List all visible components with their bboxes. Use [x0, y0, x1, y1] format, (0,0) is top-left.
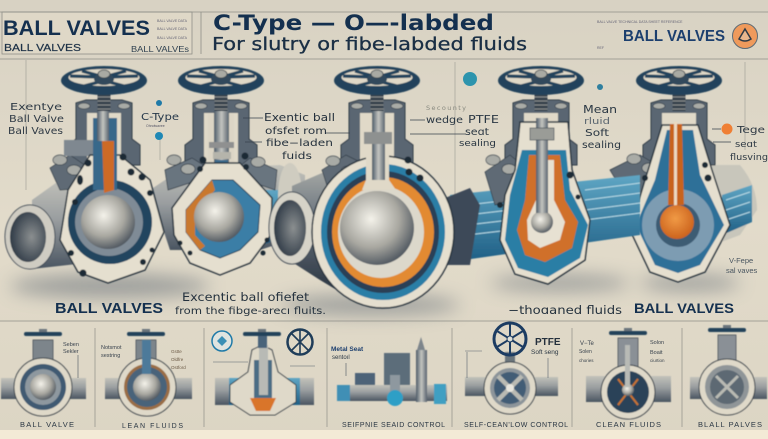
bottom panel 4: metal seat control: SEIFPNIE SEAID CONTROL	[342, 422, 445, 429]
bottom panel 5: self-clean flow control	[464, 323, 568, 429]
bottom panel 6: clean fluids: Solon	[650, 340, 664, 346]
valve 5: V-type with orange ball	[610, 66, 757, 282]
label: eccentric ball valve left	[8, 102, 64, 137]
label: soft sealing callout: rluid	[584, 117, 610, 127]
bottom panel 7: ball valves	[690, 325, 767, 429]
label: eccentric ball valve left: Ball Valve	[9, 114, 64, 125]
label: eccentric ball callout: fibe−laden	[266, 138, 333, 149]
bottom panel 6: clean fluids: ciurtion	[650, 358, 665, 363]
heading: main title: C-Type — O—-labded	[213, 11, 494, 35]
caption: eccentric ball offset: from the fibge-arecı fluits.	[175, 306, 326, 317]
label: V-type seal valves	[726, 256, 758, 275]
bottom panel 5: self-clean flow control: SELF-CEAN'LOW CONTROL	[464, 422, 568, 429]
label: PTFE wedge callout	[410, 104, 499, 149]
bottom panel 2: lean fluids	[101, 329, 192, 430]
header panel: left title box: BALL VALVES	[4, 43, 81, 54]
label: eccentric ball valve left: Exentye	[10, 102, 62, 113]
label: eccentric ball callout	[243, 111, 350, 162]
label: soft sealing callout: Soft	[585, 128, 609, 139]
label: PTFE wedge callout: Secounty	[426, 104, 466, 112]
bottom panel 4: metal seat control: Metal Seat	[331, 346, 364, 353]
bottom panel 5: self-clean flow control: PTFE	[535, 337, 561, 348]
bottom panel 3: cutaway control valve	[212, 329, 315, 415]
header panel: right brand: BALL VALVE TECHNICAL DATA SHEET REFERENCE	[597, 20, 683, 24]
bottom panel 4: metal seat control	[331, 337, 447, 429]
header panel: right brand: BALL VALVES	[623, 28, 725, 45]
caption: thickened fluids: −thoɑaned fluids	[508, 303, 622, 317]
header panel: left title box: BALL VALVE DATA	[157, 36, 188, 40]
label: soft sealing callout: Mean	[583, 104, 617, 116]
valve 3: large front valve with orange seat	[269, 66, 454, 308]
valve 2: C-type cutaway	[150, 66, 305, 275]
caption: eccentric ball offset: Excentic ball ofiefet	[182, 290, 310, 304]
bottom panel 6: clean fluids: Solen	[579, 349, 592, 355]
label: eccentric ball callout: fuids	[282, 151, 312, 162]
heading: main title	[212, 11, 527, 55]
bottom panel 2: lean fluids: Oldfre	[171, 357, 184, 362]
header panel: left title box: BALL VALVE DATA	[157, 19, 188, 23]
label: C-Type	[141, 100, 179, 160]
bottom panel 1: ball valve: Sekler	[63, 349, 79, 355]
bottom panel 2: lean fluids: Notsmot	[101, 345, 122, 351]
label: V-type seal valves: sal vaves	[726, 266, 758, 275]
bottom panel 6: clean fluids: CLEAN FLUIDS	[596, 420, 661, 429]
bottom panel 6: clean fluids: chories	[579, 358, 594, 363]
label: soft sealing callout	[582, 84, 621, 151]
label: seat flushing callout: seɑt	[735, 140, 758, 150]
bottom panel 2: lean fluids: LEAN FLUIDS	[122, 423, 183, 430]
label: soft sealing callout: sealing	[582, 140, 621, 151]
bottom panel 1: ball valve: Seben	[63, 342, 79, 348]
icon: circular gauge	[212, 331, 232, 351]
label: eccentric ball callout: Exentic ball	[264, 111, 335, 124]
label: PTFE wedge callout: PTFE	[468, 114, 499, 126]
bottom panel 5: self-clean flow control: Soft seng	[531, 349, 559, 356]
label: PTFE wedge callout: wedge	[426, 115, 463, 126]
bottom panel 6: clean fluids: V−Te	[580, 341, 595, 347]
heading: main title: For slutry or fibe-labded fluids	[212, 34, 527, 55]
bottom panel 1: ball valve: BALL VALVE	[20, 420, 74, 429]
header panel: left title box: BALL VALVEs	[131, 44, 189, 54]
bottom panel 2: lean fluids: Gstte	[171, 349, 182, 354]
bottom panel 2: lean fluids: Ostford	[171, 365, 186, 370]
header panel: left title box: BALL VALVE DATA	[157, 27, 188, 31]
icon: orange badge	[732, 24, 758, 48]
icon: large handwheel	[494, 323, 526, 355]
bottom panel 7: ball valves: BLALL PALVES	[698, 420, 762, 429]
label: C-Type: C-Type	[141, 112, 179, 123]
label: eccentric ball callout: ofsfet rom	[265, 126, 327, 137]
bottom panel 6: clean fluids: Boait	[650, 350, 663, 356]
valve 1: eccentric ball cutaway	[5, 66, 164, 283]
header panel: left title box: BALL VALVES	[3, 17, 150, 40]
label: PTFE wedge callout: sealing	[459, 139, 496, 149]
label: C-Type: Ohndwavee	[146, 124, 165, 128]
header panel: right brand: REF	[597, 46, 604, 50]
caption: eccentric ball offset	[175, 290, 326, 317]
label: eccentric ball valve left: Ball Vaves	[8, 126, 63, 137]
icon: teal dot	[463, 72, 477, 86]
header panel: right brand	[597, 20, 758, 50]
valve 4: PTFE soft seat	[440, 66, 640, 284]
header panel: left title box	[2, 12, 192, 54]
label: seat flushing callout	[712, 124, 768, 163]
label: seat flushing callout: Tege	[736, 125, 765, 136]
label: V-type seal valves: V-Fepe	[729, 256, 753, 265]
caption: ball valves left: BALL VALVES	[55, 300, 163, 317]
label: seat flushing callout: flusving	[730, 153, 768, 163]
icon: handwheel	[288, 330, 312, 354]
bottom panel 4: metal seat control: sentoıl	[332, 355, 350, 361]
bottom panel 1: ball valve	[1, 329, 86, 429]
caption: ball valves right: BALL VALVES	[634, 300, 734, 316]
ground shadows	[10, 274, 740, 315]
bottom panel 2: lean fluids: sestring	[101, 353, 120, 359]
label: PTFE wedge callout: seɑt	[465, 127, 489, 138]
bottom panel 6: clean fluids	[579, 328, 671, 429]
